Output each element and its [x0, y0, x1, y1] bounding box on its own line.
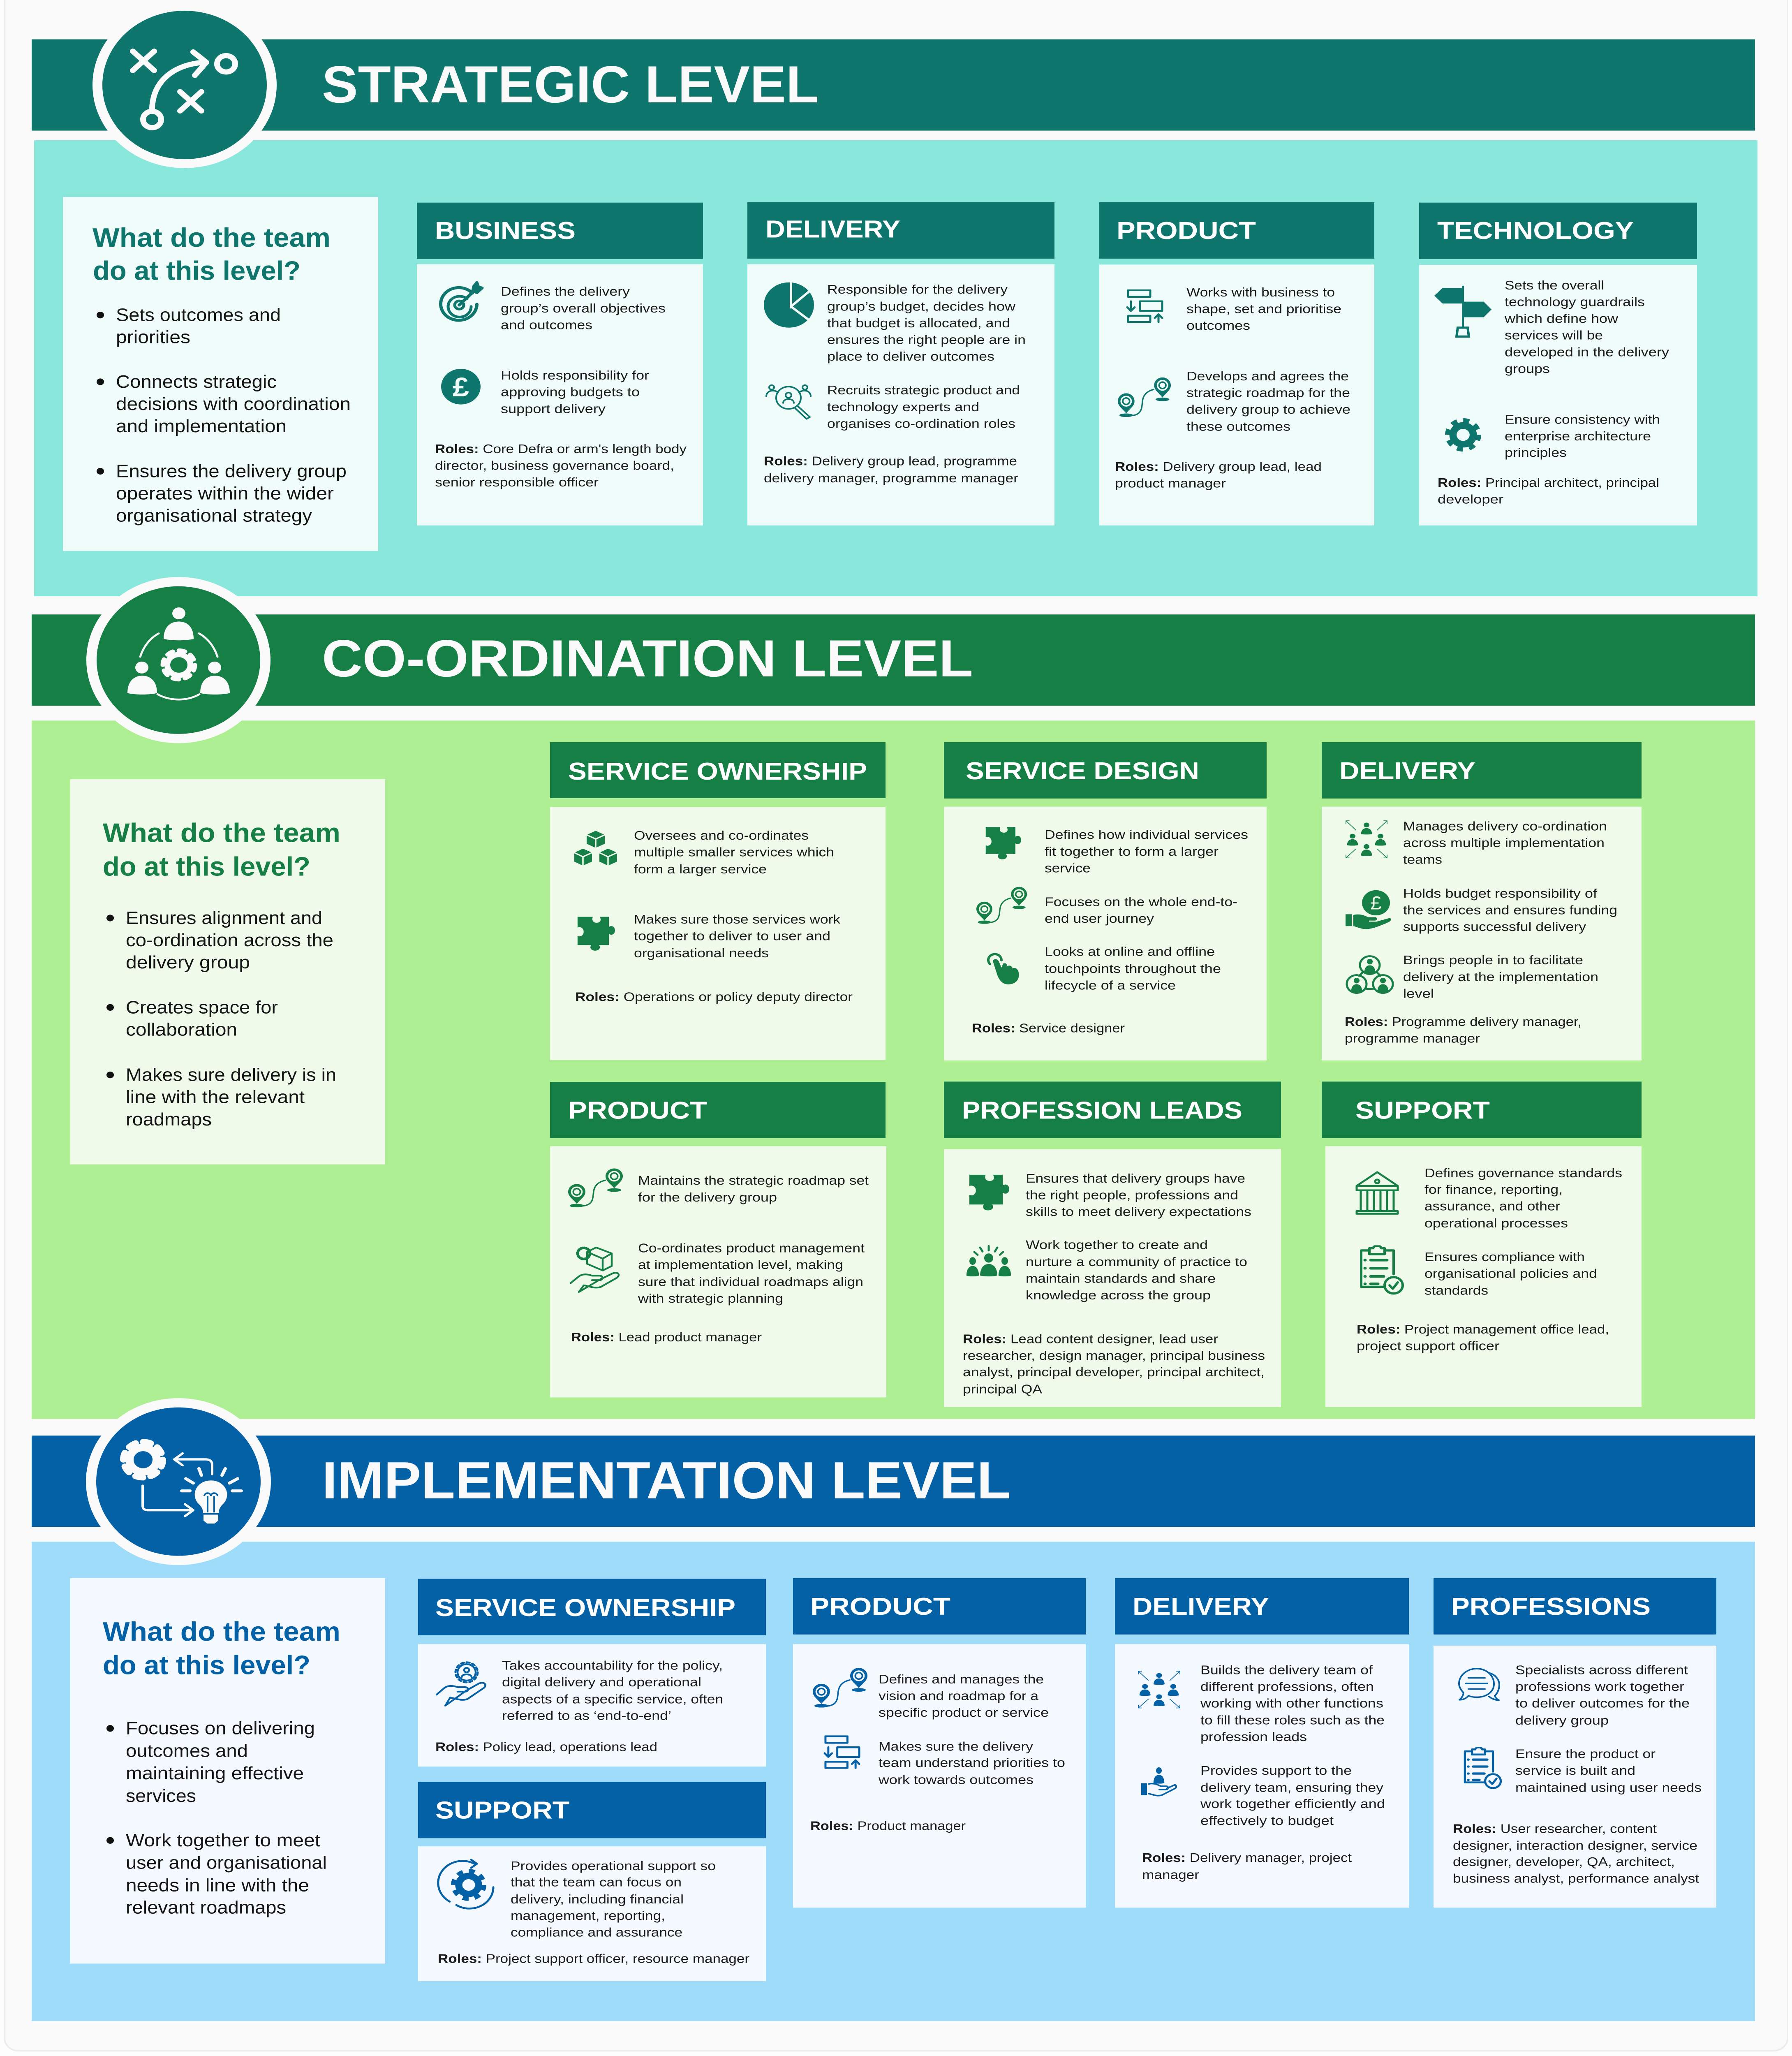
bullet list: co-ordination across the: [126, 930, 333, 950]
text: takes accountability: aspects of a specific service, often: [502, 1692, 723, 1706]
text: ensure: service is built and: [1515, 1764, 1635, 1778]
text: consistency: principles: [1505, 445, 1567, 459]
text: provides support: work together efficiently and: [1200, 1797, 1385, 1811]
icon: team and gear badge: [86, 577, 271, 743]
text: defines: Defines the delivery: [501, 285, 630, 299]
roles: [435, 442, 687, 489]
text: works: shape, set and prioritise: [1186, 302, 1341, 316]
icon: clipboard: [1465, 1747, 1501, 1788]
roles: manager: [1142, 1868, 1199, 1882]
roles: Roles: Product manager: [810, 1819, 966, 1833]
card: delivery: [1115, 1578, 1409, 1908]
text: co-ordinates: with strategic planning: [638, 1292, 783, 1306]
card: delivery: [1322, 742, 1642, 1060]
card heading: PRODUCT: [810, 1593, 950, 1620]
roles: analyst, principal developer, principal architect,: [963, 1365, 1265, 1379]
text: ensure: maintained using user needs: [1515, 1780, 1702, 1794]
text: budget: group’s budget, decides how: [827, 299, 1016, 313]
icon: roadmap: [568, 1169, 623, 1207]
text: defines governance: Defines governance standards: [1424, 1166, 1622, 1180]
text: budget: Responsible for the delivery: [827, 282, 1008, 296]
card: technology: [1419, 203, 1697, 526]
text: defines: [879, 1672, 1049, 1720]
bullet list: roadmaps: [126, 1109, 212, 1129]
icon: cubes: [574, 831, 617, 866]
icon: team with arrows: [1346, 821, 1387, 858]
text: oversees: [634, 829, 834, 876]
roles: Roles: Lead product manager: [571, 1330, 762, 1344]
icon: recruit magnifier: [766, 385, 811, 419]
text: work together: maintain standards and share: [1026, 1271, 1216, 1285]
heading: What do the team: [103, 1617, 340, 1646]
icon: community: [967, 1246, 1011, 1276]
icon: hand holding pound: [1346, 890, 1391, 929]
roles: Roles: Project management office lead,: [1357, 1322, 1609, 1336]
bullet list: decisions with coordination: [116, 394, 351, 414]
icon: bank: [1357, 1172, 1398, 1214]
roles: [1345, 1015, 1582, 1045]
card heading: TECHNOLOGY: [1437, 217, 1634, 244]
card heading: SERVICE OWNERSHIP: [568, 758, 867, 785]
bullet list: Creates space for: [126, 998, 278, 1017]
icon: target: [441, 282, 482, 320]
text: work together: [1026, 1238, 1247, 1302]
bullet list: user and organisational: [126, 1852, 327, 1873]
card heading: PRODUCT: [568, 1097, 707, 1124]
roles: Roles: Operations or policy deputy director: [575, 990, 853, 1004]
text: provides support: [1200, 1764, 1385, 1827]
text: specialists: professions work together: [1515, 1680, 1684, 1694]
text: takes accountability: [502, 1658, 723, 1723]
card: service ownership: [418, 1579, 766, 1767]
heading: do at this level?: [93, 256, 301, 286]
heading: [103, 1617, 340, 1680]
panel: what do the team do at this level: [70, 1578, 385, 1963]
text: provides support: delivery team, ensuring they: [1200, 1780, 1384, 1794]
bullet list: needs in line with the: [126, 1875, 309, 1895]
text: holds: support delivery: [501, 402, 606, 416]
card heading: SERVICE OWNERSHIP: [435, 1594, 735, 1621]
roles: [1438, 475, 1659, 506]
text: provides: delivery, including financial: [511, 1892, 684, 1906]
text: brings people: Brings people in to facilitate: [1403, 953, 1583, 967]
icon: roadmap: [813, 1668, 867, 1708]
bullet list: [97, 305, 351, 526]
text: provides support: Provides support to the: [1200, 1764, 1352, 1778]
text: makes sure: Makes sure the delivery: [879, 1739, 1034, 1753]
text: consistency: [1505, 412, 1660, 459]
card: product: [1099, 202, 1374, 526]
text: builds: profession leads: [1200, 1730, 1307, 1744]
card heading: DELIVERY: [765, 215, 900, 243]
card: service ownership: [550, 742, 886, 1060]
roles: [1357, 1322, 1609, 1353]
text: makes sure: team understand priorities to: [879, 1756, 1065, 1770]
text: builds: Builds the delivery team of: [1200, 1663, 1373, 1677]
text: makes sure: work towards outcomes: [878, 1773, 1034, 1787]
icon: puzzle: [986, 827, 1021, 859]
icon: hand supporting person: [1141, 1767, 1176, 1796]
card: service design: [944, 742, 1267, 1060]
text: develops: Develops and agrees the: [1186, 369, 1349, 383]
roles: project support officer: [1357, 1339, 1499, 1353]
text: makes sure: [634, 912, 841, 960]
bullet list: delivery group: [126, 952, 250, 972]
text: oversees: Oversees and co-ordinates: [634, 829, 809, 843]
bullet list: maintaining effective: [126, 1763, 304, 1783]
text: provides: compliance and assurance: [511, 1925, 682, 1939]
bullet list: and implementation: [116, 416, 287, 436]
text: brings people: level: [1403, 986, 1434, 1000]
text: holds: [501, 368, 649, 416]
text: recruits: organises co-ordination roles: [827, 417, 1015, 431]
text: works: Works with business to: [1186, 285, 1335, 299]
text: recruits: [827, 383, 1020, 431]
text: guardrails: which define how: [1504, 312, 1619, 326]
card heading: DELIVERY: [1339, 757, 1475, 785]
text: ensure: [1515, 1747, 1702, 1794]
text: maintains: Maintains the strategic roadmap set: [638, 1174, 869, 1188]
text: compliance: organisational policies and: [1424, 1266, 1597, 1280]
text: makes sure: together to deliver to user and: [634, 929, 830, 943]
icon: prioritise: [1127, 290, 1162, 322]
text: defines: group’s overall objectives: [501, 301, 666, 315]
card: profession leads: [944, 1081, 1281, 1407]
card: product: [550, 1082, 886, 1397]
icon: puzzle: [578, 917, 615, 951]
text: compliance: Ensures compliance with: [1424, 1250, 1585, 1264]
roles: [963, 1332, 1265, 1396]
text: holds budget: supports successful delivery: [1403, 920, 1586, 934]
text: brings people: delivery at the implementation: [1403, 970, 1598, 984]
text: builds: [1200, 1663, 1385, 1744]
heading: What do the team: [92, 222, 331, 252]
roles: designer, interaction designer, service: [1453, 1838, 1697, 1852]
text: guardrails: Sets the overall: [1505, 278, 1604, 292]
text: looks at: touchpoints throughout the: [1045, 962, 1221, 976]
icon: play diagram badge: [92, 2, 277, 168]
icon: gear with cycle arrows: [438, 1860, 493, 1908]
text: takes accountability: Takes accountability for the policy,: [502, 1658, 723, 1672]
text: provides: Provides operational support so: [511, 1859, 716, 1873]
heading: do at this level?: [103, 852, 310, 882]
icon: speech bubbles: [1459, 1669, 1499, 1700]
text: focuses: [1045, 895, 1237, 926]
section: strategic level: [32, 2, 1757, 596]
bullet list: [106, 1718, 327, 1917]
roles: Roles: Core Defra or arm's length body: [435, 442, 687, 456]
roles: Roles: Policy lead, operations lead: [435, 1740, 657, 1754]
text: guardrails: technology guardrails: [1505, 295, 1645, 309]
roles: Roles: Delivery manager, project: [1142, 1851, 1352, 1865]
heading: What do the team: [103, 818, 340, 848]
section: implementation level: [32, 1398, 1755, 2021]
roles: Roles: Project support officer, resource manager: [438, 1952, 749, 1966]
text: work together: nurture a community of practice to: [1026, 1255, 1247, 1269]
icon: hand with box and gear: [571, 1248, 619, 1292]
text: defines governance: assurance, and other: [1424, 1199, 1560, 1213]
text: guardrails: groups: [1505, 361, 1550, 376]
heading: do at this level?: [103, 1650, 310, 1680]
text: provides: [511, 1859, 716, 1939]
title: co-ordination level: CO-ORDINATION LEVEL: [322, 629, 973, 688]
roles: developer: [1438, 492, 1503, 506]
card: support: [1322, 1081, 1642, 1407]
icon: three connected people: [1347, 956, 1393, 993]
bullet list: line with the relevant: [126, 1087, 305, 1107]
roles: programme manager: [1345, 1031, 1480, 1045]
text: recruits: Recruits strategic product and: [827, 383, 1020, 397]
bullet list: [106, 908, 336, 1129]
roles: [764, 454, 1018, 485]
bullet list: outcomes and: [126, 1741, 248, 1761]
text: work together: knowledge across the group: [1026, 1288, 1211, 1302]
text: recruits: technology experts and: [827, 400, 979, 414]
text: specialists: Specialists across different: [1515, 1663, 1688, 1677]
roles: Roles: Principal architect, principal: [1438, 475, 1659, 490]
text: co-ordinates: at implementation level, making: [638, 1258, 843, 1272]
bullet list: organisational strategy: [116, 506, 312, 526]
text: co-ordinates: Co-ordinates product management: [638, 1241, 865, 1255]
text: specialists: delivery group: [1515, 1713, 1609, 1727]
text: looks at: lifecycle of a service: [1045, 978, 1176, 992]
text: makes sure: organisational needs: [634, 946, 769, 960]
icon: team with arrows: [1138, 1671, 1180, 1708]
bullet list: Sets outcomes and: [116, 305, 281, 325]
text: builds: to fill these roles such as the: [1200, 1713, 1385, 1727]
text: guardrails: developed in the delivery: [1505, 345, 1669, 359]
bullet list: Makes sure delivery is in: [126, 1065, 336, 1085]
text: holds budget: Holds budget responsibility of: [1403, 886, 1598, 900]
roles: [1453, 1822, 1699, 1885]
text: makes sure: Makes sure those services work: [634, 912, 841, 926]
text: maintains: for the delivery group: [638, 1190, 777, 1204]
card heading: DELIVERY: [1133, 1593, 1269, 1620]
text: co-ordinates: sure that individual roadmaps align: [638, 1275, 863, 1289]
text: defines: and outcomes: [501, 318, 592, 332]
roles: senior responsible officer: [435, 475, 599, 489]
text: guardrails: services will be: [1505, 328, 1603, 342]
text: works: outcomes: [1186, 319, 1250, 333]
text: maintains: [638, 1174, 869, 1204]
bullet list: relevant roadmaps: [126, 1898, 286, 1917]
text: guardrails: [1504, 278, 1669, 376]
text: builds: different professions, often: [1200, 1680, 1374, 1694]
roles: Roles: Programme delivery manager,: [1345, 1015, 1582, 1029]
heading: [103, 818, 340, 882]
text: manages: Manages delivery co-ordination: [1403, 819, 1607, 833]
card heading: BUSINESS: [435, 217, 576, 244]
roles: principal QA: [963, 1382, 1042, 1396]
text: provides: management, reporting,: [511, 1908, 665, 1922]
banner: co-ordination level: [32, 614, 1755, 706]
bullet list: Ensures alignment and: [126, 908, 322, 928]
text: oversees: form a larger service: [634, 862, 767, 876]
card: support: [418, 1782, 766, 1981]
bullet list: Ensures the delivery group: [116, 461, 347, 481]
bullet list: Focuses on delivering: [126, 1718, 315, 1738]
text: makes sure: [878, 1739, 1065, 1787]
text: manages: across multiple implementation: [1403, 836, 1605, 850]
text: provides support: effectively to budget: [1200, 1813, 1334, 1827]
card heading: PROFESSIONS: [1451, 1593, 1651, 1620]
section: co-ordination level: [32, 577, 1755, 1419]
text: budget: place to deliver outcomes: [827, 350, 994, 364]
bullet list: priorities: [116, 327, 190, 347]
text: defines: Defines how individual services: [1045, 828, 1248, 842]
text: work together: Work together to create and: [1026, 1238, 1208, 1252]
icon: hand holding pound: £: [1370, 893, 1382, 914]
roles: [1142, 1851, 1352, 1882]
card heading: SERVICE DESIGN: [966, 757, 1199, 785]
text: provides: that the team can focus on: [511, 1875, 682, 1889]
icon: puzzle: [969, 1175, 1009, 1211]
text: defines governance: for finance, reporting,: [1424, 1182, 1563, 1197]
icon: touch hand: [988, 954, 1019, 984]
icon: clipboard: [1361, 1246, 1403, 1294]
bullet list: collaboration: [126, 1020, 237, 1040]
roles: product manager: [1115, 476, 1226, 490]
text: consistency: enterprise architecture: [1505, 429, 1651, 443]
panel: co-ordination background: [32, 720, 1755, 1419]
text: ensures: the right people, professions and: [1026, 1188, 1238, 1202]
bullet list: Work together to meet: [126, 1830, 320, 1850]
text: ensures: Ensures that delivery groups have: [1026, 1171, 1245, 1185]
card: professions: [1434, 1578, 1716, 1908]
roles: Roles: Delivery group lead, lead: [1115, 460, 1322, 474]
text: budget: ensures the right people are in: [827, 333, 1026, 347]
text: defines: Defines and manages the: [879, 1672, 1044, 1686]
panel: what do the team do at this level: [63, 197, 378, 551]
card: delivery: [747, 202, 1054, 526]
text: ensures: skills to meet delivery expectations: [1026, 1205, 1251, 1219]
text: defines governance: [1424, 1166, 1622, 1230]
text: holds: Holds responsibility for: [501, 368, 649, 382]
roles: [1115, 460, 1322, 490]
banner: implementation level: [32, 1435, 1755, 1527]
icon: pound: [441, 369, 481, 405]
card: product: [793, 1578, 1086, 1908]
text: develops: [1186, 369, 1350, 433]
text: ensure: Ensure the product or: [1515, 1747, 1656, 1761]
icon: pie chart: [764, 281, 814, 328]
roles: designer, developer, QA, architect,: [1453, 1855, 1675, 1869]
roles: Roles: User researcher, content: [1453, 1822, 1657, 1836]
bullet list: Connects strategic: [116, 372, 277, 391]
text: focuses: Focuses on the whole end-to-: [1045, 895, 1237, 909]
text: develops: these outcomes: [1186, 419, 1290, 433]
card heading: SUPPORT: [1355, 1097, 1490, 1124]
icon: pound: £: [453, 372, 469, 402]
text: works: [1186, 285, 1341, 333]
title: implementation level: IMPLEMENTATION LEVEL: [322, 1451, 1011, 1510]
text: defines: vision and roadmap for a: [879, 1689, 1038, 1703]
text: defines: [1045, 828, 1248, 875]
text: looks at: Looks at online and offline: [1045, 945, 1215, 959]
card heading: SUPPORT: [435, 1797, 569, 1824]
icon: roadmap: [976, 887, 1027, 924]
title: strategic level: STRATEGIC LEVEL: [322, 55, 819, 114]
roles: Roles: Delivery group lead, programme: [764, 454, 1017, 468]
text: specialists: to deliver outcomes for the: [1515, 1696, 1690, 1710]
text: takes accountability: digital delivery and operational: [502, 1675, 701, 1689]
text: specialists: [1515, 1663, 1690, 1727]
text: oversees: multiple smaller services which: [634, 845, 834, 859]
text: builds: working with other functions: [1200, 1696, 1383, 1710]
icon: gear and light bulb badge: [86, 1398, 271, 1565]
text: compliance: [1424, 1250, 1597, 1297]
text: manages: [1403, 819, 1607, 866]
icon: gear: [1447, 421, 1479, 449]
roles: researcher, design manager, principal business: [963, 1349, 1265, 1363]
text: defines governance: operational processes: [1424, 1216, 1568, 1230]
text: focuses: end user journey: [1045, 912, 1154, 926]
text: develops: strategic roadmap for the: [1186, 386, 1350, 400]
text: co-ordinates: [638, 1241, 865, 1306]
card: business: [417, 203, 703, 526]
roles: delivery manager, programme manager: [764, 471, 1018, 485]
heading: [92, 222, 331, 286]
text: develops: delivery group to achieve: [1186, 403, 1350, 417]
bullet list: operates within the wider: [116, 484, 334, 503]
text: defines: [501, 285, 666, 332]
bullet list: services: [126, 1786, 196, 1806]
banner: strategic level: [32, 39, 1755, 131]
panel: strategic background: [34, 140, 1757, 596]
text: takes accountability: referred to as ‘end-to-end’: [502, 1709, 671, 1723]
text: budget: that budget is allocated, and: [827, 316, 1010, 330]
panel: implementation background: [32, 1542, 1755, 2021]
roles: Roles: Service designer: [972, 1021, 1125, 1035]
icon: prioritise: [825, 1736, 859, 1768]
text: manages: teams: [1403, 852, 1442, 866]
text: consistency: Ensure consistency with: [1505, 412, 1660, 426]
text: defines: specific product or service: [879, 1706, 1049, 1720]
roles: Roles: Lead content designer, lead user: [963, 1332, 1218, 1346]
text: brings people: [1403, 953, 1598, 1000]
card heading: PRODUCT: [1117, 217, 1256, 244]
text: compliance: standards: [1424, 1283, 1488, 1297]
text: ensures: [1026, 1171, 1251, 1219]
icon: hand with gear person: [437, 1662, 486, 1706]
icon: signpost: [1434, 286, 1491, 336]
panel: what do the team do at this level: [70, 779, 385, 1165]
roles: director, business governance board,: [435, 458, 674, 472]
text: holds: approving budgets to: [501, 385, 640, 399]
card heading: PROFESSION LEADS: [962, 1097, 1242, 1124]
icon: roadmap: [1118, 377, 1171, 417]
text: looks at: [1045, 945, 1221, 992]
text: holds budget: the services and ensures funding: [1403, 903, 1617, 917]
text: holds budget: [1403, 886, 1617, 934]
text: defines: fit together to form a larger: [1045, 844, 1219, 858]
text: defines: service: [1045, 861, 1091, 875]
text: budget: [827, 282, 1026, 364]
roles: business analyst, performance analyst: [1453, 1871, 1699, 1885]
